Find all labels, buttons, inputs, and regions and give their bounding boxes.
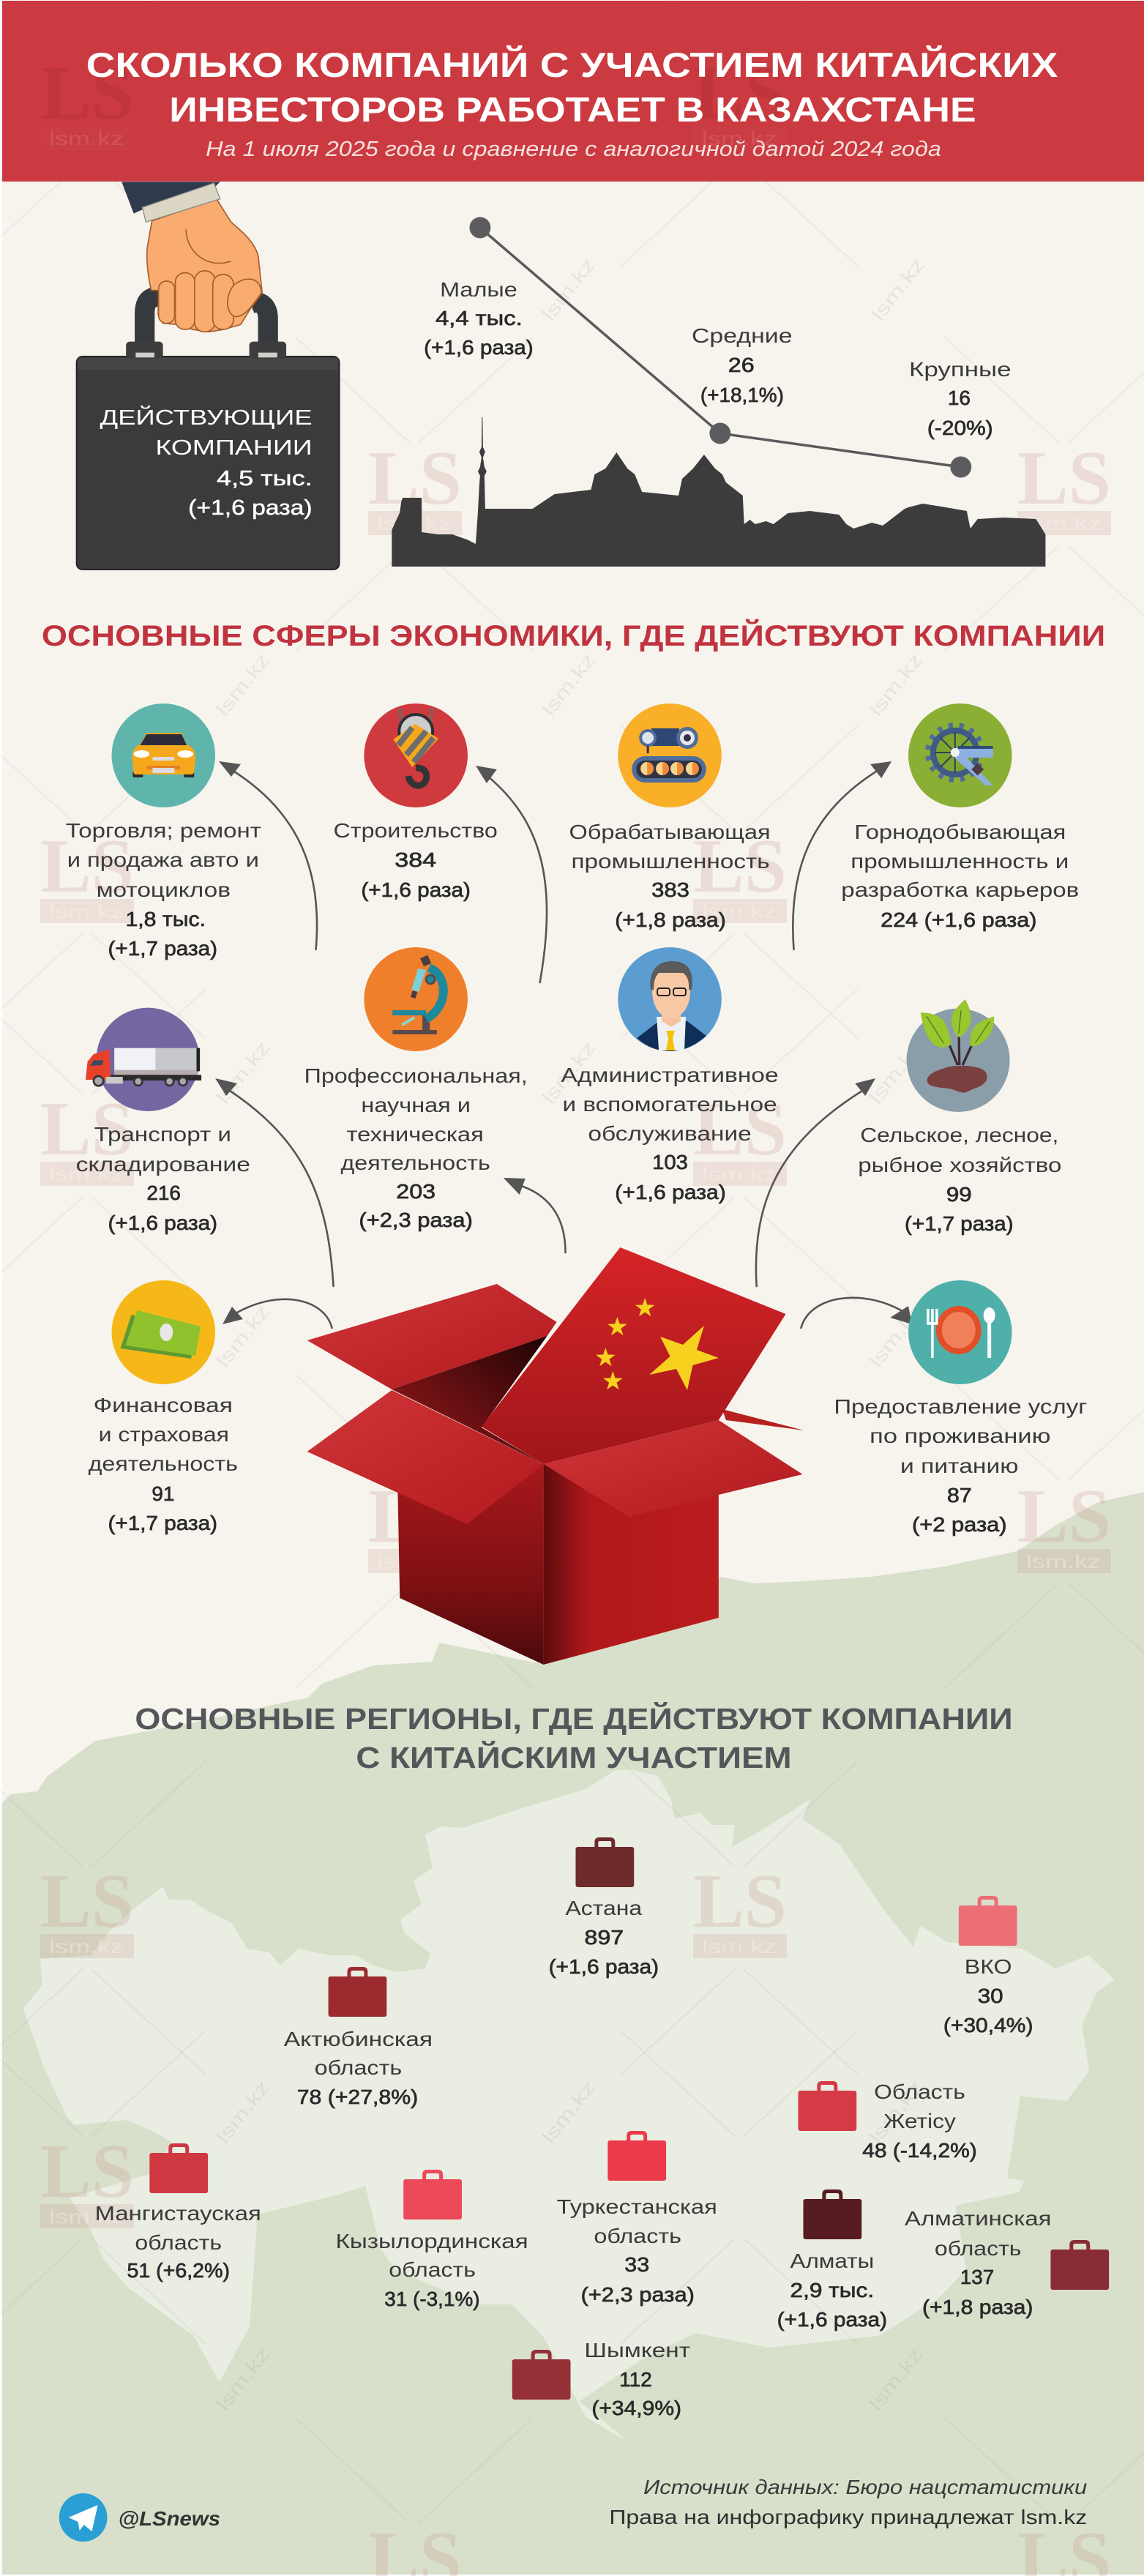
label: Шымкент xyxy=(584,2339,690,2362)
label: Алматы xyxy=(790,2250,874,2272)
watermark pattern: lsm.kz xyxy=(212,649,274,720)
label: 137 xyxy=(960,2266,994,2288)
label: область xyxy=(935,2237,1022,2260)
title xyxy=(86,46,1058,129)
icon: suitcase xyxy=(959,1896,1017,1946)
icon: suitcase xyxy=(1050,2240,1109,2290)
briefcase label: ДЕЙСТВУЮЩИЕ xyxy=(100,405,313,430)
label: Обрабатывающая xyxy=(569,821,771,843)
icon: money xyxy=(112,1280,215,1384)
watermark pattern: lsm.kz xyxy=(537,1037,599,1108)
watermark pattern: lsm.kz xyxy=(212,2343,274,2415)
sector: construction xyxy=(334,703,498,901)
watermark pattern: lsm.kz xyxy=(49,900,124,922)
watermark pattern: lsm.kz xyxy=(702,127,777,149)
watermark pattern: lsm.kz xyxy=(49,1935,124,1957)
heading: regions: ОСНОВНЫЕ РЕГИОНЫ, ГДЕ ДЕЙСТВУЮТ КОМПАНИИ xyxy=(135,1702,1013,1736)
label: (+1,8 раза) xyxy=(615,908,726,931)
label: Туркестанская xyxy=(557,2195,717,2218)
icon: hand holding briefcase xyxy=(77,182,340,570)
chart: company size line xyxy=(469,217,971,477)
heading: regions: С КИТАЙСКИМ УЧАСТИЕМ xyxy=(356,1741,792,1774)
briefcase xyxy=(77,356,340,570)
label: (+1,6 раза) xyxy=(615,1181,726,1203)
telegram handle: @LSnews xyxy=(118,2507,220,2530)
label: 91 xyxy=(152,1482,174,1505)
watermark pattern: lsm.kz xyxy=(377,512,452,534)
watermark pattern: LS xyxy=(693,50,787,135)
watermark pattern: lsm.kz xyxy=(867,253,929,325)
label: деятельность xyxy=(89,1452,238,1475)
label: small companies: Малые xyxy=(440,278,517,301)
label: medium companies xyxy=(692,324,793,406)
label: 383 xyxy=(651,878,689,901)
label: 33 xyxy=(624,2253,649,2276)
label: 384 xyxy=(395,848,436,871)
watermark pattern: lsm.kz xyxy=(212,1300,274,1372)
label: промышленность и xyxy=(850,850,1069,873)
label: Строительство xyxy=(334,819,498,842)
icon: suitcase xyxy=(798,2081,856,2131)
sector: finance and insurance xyxy=(89,1280,238,1534)
watermark pattern: lsm.kz xyxy=(377,1550,452,1572)
watermark pattern: LS xyxy=(40,1858,134,1944)
label: и вспомогательное xyxy=(563,1093,777,1116)
label: (+1,6 раза) xyxy=(108,1212,217,1234)
hand and handle xyxy=(121,182,286,359)
label xyxy=(336,2230,528,2310)
arrows from box to sectors xyxy=(215,761,912,1328)
label: (+2,3 раза) xyxy=(359,1209,473,1231)
label: (+34,9%) xyxy=(591,2397,681,2419)
label: (+1,7 раза) xyxy=(108,937,217,960)
label: область xyxy=(315,2056,402,2079)
sector: trade and car repair xyxy=(66,703,261,960)
label: обслуживание xyxy=(588,1122,752,1145)
region: East Kazakhstan xyxy=(943,1896,1033,2036)
label: Торговля; ремонт xyxy=(66,819,261,842)
label: научная и xyxy=(361,1094,471,1116)
heading: economic sectors: ОСНОВНЫЕ СФЕРЫ ЭКОНОМИКИ, ГДЕ ДЕЙСТВУЮТ КОМПАНИИ xyxy=(42,619,1105,652)
sector: manufacturing xyxy=(569,703,771,931)
label xyxy=(834,1395,1087,1536)
label: Финансовая xyxy=(94,1394,233,1416)
label: medium companies: Средние xyxy=(692,324,793,347)
icon: crane hook xyxy=(364,703,468,807)
watermark pattern: LS xyxy=(368,1473,462,1558)
label: Алматинская xyxy=(905,2207,1051,2230)
watermark pattern: lsm.kz xyxy=(206,253,268,325)
sector: professional and scientific xyxy=(304,947,528,1231)
icon: suitcase xyxy=(512,2350,570,2400)
region: Almaty oblast xyxy=(905,2207,1109,2318)
watermark pattern: lsm.kz xyxy=(864,2343,927,2415)
label: (+1,6 раза) xyxy=(777,2308,887,2331)
icon: suitcase xyxy=(149,2143,208,2193)
label: деятельность xyxy=(341,1151,490,1174)
heading: regions xyxy=(135,1702,1013,1774)
label xyxy=(561,1064,779,1203)
icon: truck xyxy=(86,1008,201,1111)
subtitle: На 1 июля 2025 года и сравнение с аналогичной датой 2024 года xyxy=(206,138,941,161)
label: large companies: 16 xyxy=(948,387,971,409)
watermark pattern: LS xyxy=(40,1086,134,1171)
watermark pattern: lsm.kz xyxy=(702,900,777,922)
label xyxy=(841,821,1079,931)
title: ИНВЕСТОРОВ РАБОТАЕТ В КАЗАХСТАНЕ xyxy=(169,91,976,129)
icon: suitcase xyxy=(803,2189,861,2239)
watermark pattern: LS xyxy=(1017,435,1111,520)
label: 216 xyxy=(146,1181,181,1204)
watermark pattern: LS xyxy=(693,1858,787,1944)
label: область xyxy=(594,2225,681,2247)
label xyxy=(284,2028,433,2108)
watermark pattern: LS xyxy=(1017,1473,1111,1558)
label: (+1,6 раза) xyxy=(549,1955,659,1978)
label xyxy=(66,819,261,960)
label xyxy=(569,821,771,931)
label: 203 xyxy=(396,1180,435,1203)
label: medium companies: (+18,1%) xyxy=(700,384,784,406)
label: 31 (-3,1%) xyxy=(384,2288,480,2310)
label: (+1,8 раза) xyxy=(922,2296,1033,2318)
region: Turkestan xyxy=(557,2131,717,2306)
label: Астана xyxy=(566,1897,643,1919)
label: small companies: 4,4 тыс. xyxy=(435,307,523,329)
region: Mangystau xyxy=(95,2143,261,2282)
label: 224 (+1,6 раза) xyxy=(881,908,1036,931)
label: Мангистауская xyxy=(95,2202,261,2225)
region: Shymkent xyxy=(512,2339,690,2419)
watermark pattern: LS xyxy=(40,50,134,135)
copyright line: Права на инфографику принадлежат lsm.kz xyxy=(609,2506,1087,2528)
label: промышленность xyxy=(571,850,770,873)
label: 103 xyxy=(652,1151,688,1173)
watermark pattern: lsm.kz xyxy=(49,2206,124,2228)
icon: plate and cutlery xyxy=(908,1280,1012,1384)
icon: microscope xyxy=(364,947,468,1051)
header band xyxy=(2,1,1144,182)
sector: transport and warehousing xyxy=(76,1008,250,1234)
label: 87 xyxy=(947,1484,972,1507)
label: 112 xyxy=(619,2368,652,2391)
label xyxy=(334,819,498,901)
label xyxy=(95,2202,261,2282)
label: Область xyxy=(874,2080,965,2103)
label: складирование xyxy=(76,1153,250,1176)
label xyxy=(76,1123,250,1234)
watermark pattern: lsm.kz xyxy=(212,1037,274,1108)
label: область xyxy=(135,2231,222,2254)
icon: open red box with Chinese flag xyxy=(307,1247,804,1665)
label: Предоставление услуг xyxy=(834,1395,1087,1418)
label: Актюбинская xyxy=(284,2028,433,2050)
region: Kyzylorda xyxy=(336,2170,528,2310)
title: СКОЛЬКО КОМПАНИЙ С УЧАСТИЕМ КИТАЙСКИХ xyxy=(86,46,1058,84)
watermark pattern: lsm.kz xyxy=(537,253,599,325)
label xyxy=(777,2250,887,2331)
label: 78 (+27,8%) xyxy=(297,2086,418,2108)
watermark pattern: LS xyxy=(40,2128,134,2214)
label: Жетісу xyxy=(883,2110,956,2132)
watermark pattern: LS xyxy=(40,823,134,908)
label: (+1,6 раза) xyxy=(361,878,471,901)
icon: suitcase xyxy=(403,2170,462,2220)
map background xyxy=(2,1492,1144,2575)
map: Kazakhstan xyxy=(24,1770,1113,2438)
briefcase label: 4,5 тыс. xyxy=(217,467,313,490)
icon: businessman xyxy=(618,947,722,1051)
watermark pattern: LS xyxy=(693,823,787,908)
label: и питанию xyxy=(900,1455,1019,1477)
label: Транспорт и xyxy=(94,1123,231,1146)
flag xyxy=(482,1247,786,1464)
label: 99 xyxy=(946,1183,972,1206)
label: 1,8 тыс. xyxy=(125,908,206,930)
city skyline xyxy=(392,417,1045,567)
label: область xyxy=(389,2258,476,2281)
label: (+30,4%) xyxy=(943,2014,1033,2036)
briefcase label: (+1,6 раза) xyxy=(188,496,313,520)
label xyxy=(905,2207,1051,2318)
watermark pattern: lsm.kz xyxy=(212,2076,274,2148)
icon: robot arm conveyor xyxy=(618,703,722,807)
label: (+1,7 раза) xyxy=(108,1512,217,1534)
label: Кызылординская xyxy=(336,2230,528,2252)
label: Сельское, лесное, xyxy=(860,1124,1058,1146)
region: Astana xyxy=(549,1837,659,1978)
watermark pattern: lsm.kz xyxy=(864,1300,927,1372)
icon: bucket wheel xyxy=(908,703,1012,807)
label: мотоциклов xyxy=(97,878,231,901)
watermark pattern: LS xyxy=(368,435,462,520)
label: Административное xyxy=(561,1064,779,1086)
briefcase label: КОМПАНИИ xyxy=(155,436,313,460)
label: техническая xyxy=(346,1123,484,1146)
label: ВКО xyxy=(965,1955,1012,1978)
icon: suitcase xyxy=(575,1837,634,1887)
label: (+2 раза) xyxy=(912,1513,1007,1536)
source line: Источник данных: Бюро нацстатистики xyxy=(643,2476,1087,2498)
briefcase label xyxy=(100,405,313,520)
label xyxy=(557,2195,717,2306)
label: по проживанию xyxy=(870,1425,1050,1447)
label xyxy=(89,1394,238,1534)
label: разработка карьеров xyxy=(841,878,1079,901)
label: 2,9 тыс. xyxy=(790,2279,874,2301)
label: и страховая xyxy=(99,1423,229,1446)
sector: accommodation and food xyxy=(834,1280,1087,1536)
label: 51 (+6,2%) xyxy=(127,2259,230,2282)
watermark pattern: lsm.kz xyxy=(864,649,927,720)
label: 30 xyxy=(978,1985,1003,2007)
label: и продажа авто и xyxy=(67,848,259,871)
icon: plant xyxy=(907,999,1010,1112)
watermark pattern: lsm.kz xyxy=(49,127,124,149)
region: Aktobe xyxy=(284,1967,433,2108)
icon: suitcase xyxy=(607,2131,666,2181)
watermark pattern: lsm.kz xyxy=(49,1163,124,1185)
watermark pattern: lsm.kz xyxy=(537,2076,599,2148)
icon: suitcase xyxy=(329,1967,386,2017)
label: 48 (-14,2%) xyxy=(862,2139,977,2162)
region: Zhetisu xyxy=(798,2080,977,2162)
label: 897 xyxy=(584,1926,624,1949)
label: small companies xyxy=(424,278,534,359)
label: (+2,3 раза) xyxy=(580,2283,695,2306)
label xyxy=(584,2339,690,2419)
watermark pattern: lsm.kz xyxy=(864,1037,927,1108)
label xyxy=(858,1124,1061,1235)
region: Almaty city xyxy=(777,2189,887,2331)
label xyxy=(862,2080,977,2162)
sector: agriculture xyxy=(858,999,1061,1235)
sector: administrative services xyxy=(561,947,779,1203)
watermark pattern: lsm.kz xyxy=(1026,1550,1101,1572)
label xyxy=(943,1955,1033,2036)
sector: mining xyxy=(841,703,1079,931)
label: large companies: Крупные xyxy=(909,358,1012,381)
label: (+1,7 раза) xyxy=(905,1212,1014,1235)
label: small companies: (+1,6 раза) xyxy=(424,336,534,359)
label xyxy=(549,1897,659,1978)
label xyxy=(304,1064,528,1231)
watermark pattern: lsm.kz xyxy=(1026,512,1101,534)
label: large companies xyxy=(909,358,1012,439)
watermark pattern: lsm.kz xyxy=(864,2076,927,2148)
label: Профессиональная, xyxy=(304,1064,528,1087)
watermark pattern: LS xyxy=(693,1086,787,1171)
icon: telegram xyxy=(59,2493,108,2542)
label: large companies: (-20%) xyxy=(927,417,993,439)
label: Горнодобывающая xyxy=(854,821,1066,843)
label: рыбное хозяйство xyxy=(858,1154,1061,1176)
watermark pattern: lsm.kz xyxy=(702,1163,777,1185)
icon: car xyxy=(112,703,215,807)
label: medium companies: 26 xyxy=(728,354,755,376)
watermark pattern: lsm.kz xyxy=(702,1935,777,1957)
watermark pattern: lsm.kz xyxy=(537,649,599,720)
